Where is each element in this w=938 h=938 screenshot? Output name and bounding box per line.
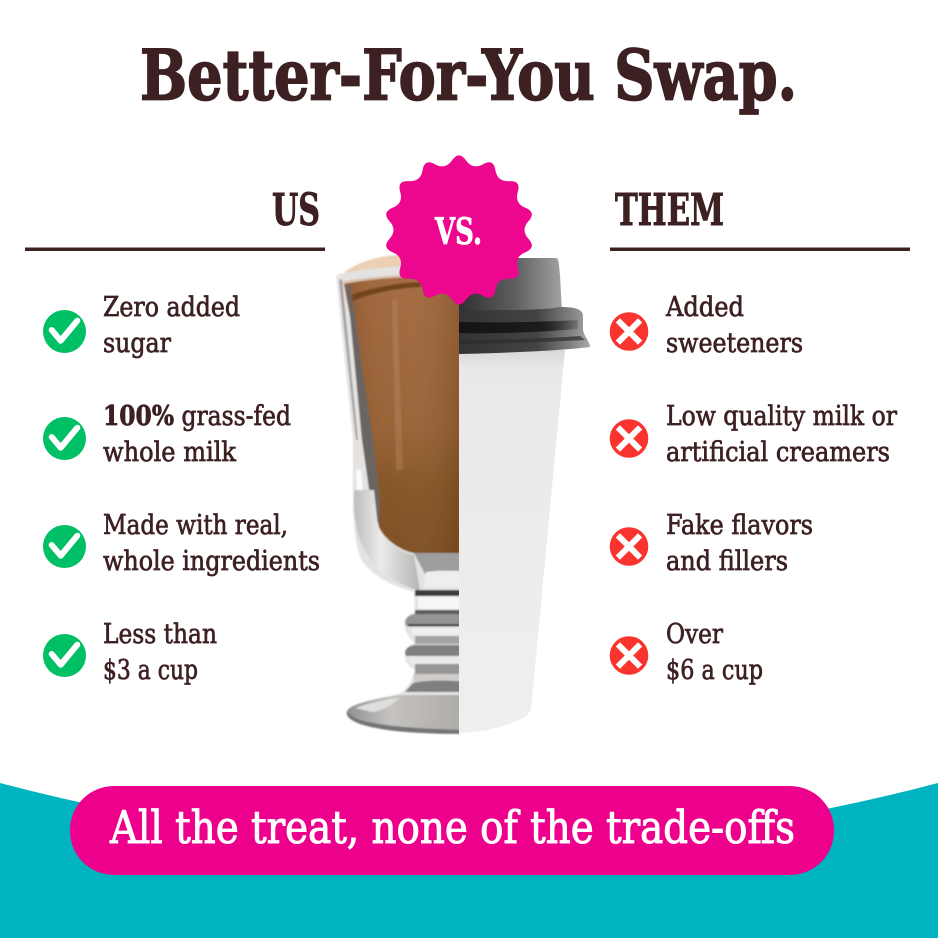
cup lid dome (459, 258, 562, 312)
item: zero added sugar: Zero added (103, 291, 240, 323)
item: real whole ingredients: whole ingredients (103, 545, 320, 577)
item: added sweeteners: Added (665, 291, 744, 323)
glass bowl (354, 490, 420, 591)
item: fake flavors and fillers: and fillers (666, 545, 788, 577)
glass foot (346, 694, 459, 730)
item: less than $3 a cup (43, 618, 217, 686)
panel: US list (43, 291, 320, 686)
badge: VS. (386, 155, 532, 305)
item: over $6 a cup (610, 618, 763, 686)
item: grass-fed whole milk (43, 400, 291, 468)
badge: VS.: VS. (434, 211, 482, 253)
item: added sweeteners (610, 291, 803, 359)
item: low quality milk or artificial creamers: Low quality milk or (666, 400, 898, 432)
title: Better-For-You Swap. (140, 36, 797, 116)
panel: THEM list (610, 291, 898, 686)
heading: US: US (272, 185, 320, 236)
banner: tagline pill (70, 786, 834, 875)
cup lid rim (459, 307, 590, 354)
item: added sweeteners: sweeteners (666, 327, 803, 359)
footer: teal wave background (0, 783, 938, 938)
item: zero added sugar (43, 291, 240, 359)
item: grass-fed whole milk: 100% grass-fed (103, 400, 291, 432)
item: less than $3 a cup: $3 a cup (103, 654, 198, 686)
heading: THEM: THEM (615, 185, 724, 236)
item: over $6 a cup: $6 a cup (666, 654, 763, 686)
item: grass-fed whole milk: whole milk (103, 436, 236, 468)
glass wall reflections (347, 284, 380, 525)
item: real whole ingredients: Made with real, (103, 509, 288, 541)
paper cup body (459, 350, 565, 733)
item: low quality milk or artificial creamers: artificial creamers (666, 436, 890, 468)
item: over $6 a cup: Over (666, 618, 724, 650)
item: real whole ingredients (43, 509, 320, 577)
coffee (344, 275, 470, 553)
item: zero added sugar: sugar (103, 327, 172, 359)
item: less than $3 a cup: Less than (103, 618, 217, 650)
item: fake flavors and fillers (610, 509, 813, 577)
item: fake flavors and fillers: Fake flavors (666, 509, 813, 541)
item: low quality milk or artificial creamers (610, 400, 898, 468)
banner: tagline pill: All the treat, none of the trade-offs (109, 801, 795, 854)
glass goblet, left half (336, 255, 470, 734)
stem rings (415, 590, 470, 596)
image: half glass of coffee, half paper cup (336, 155, 590, 734)
